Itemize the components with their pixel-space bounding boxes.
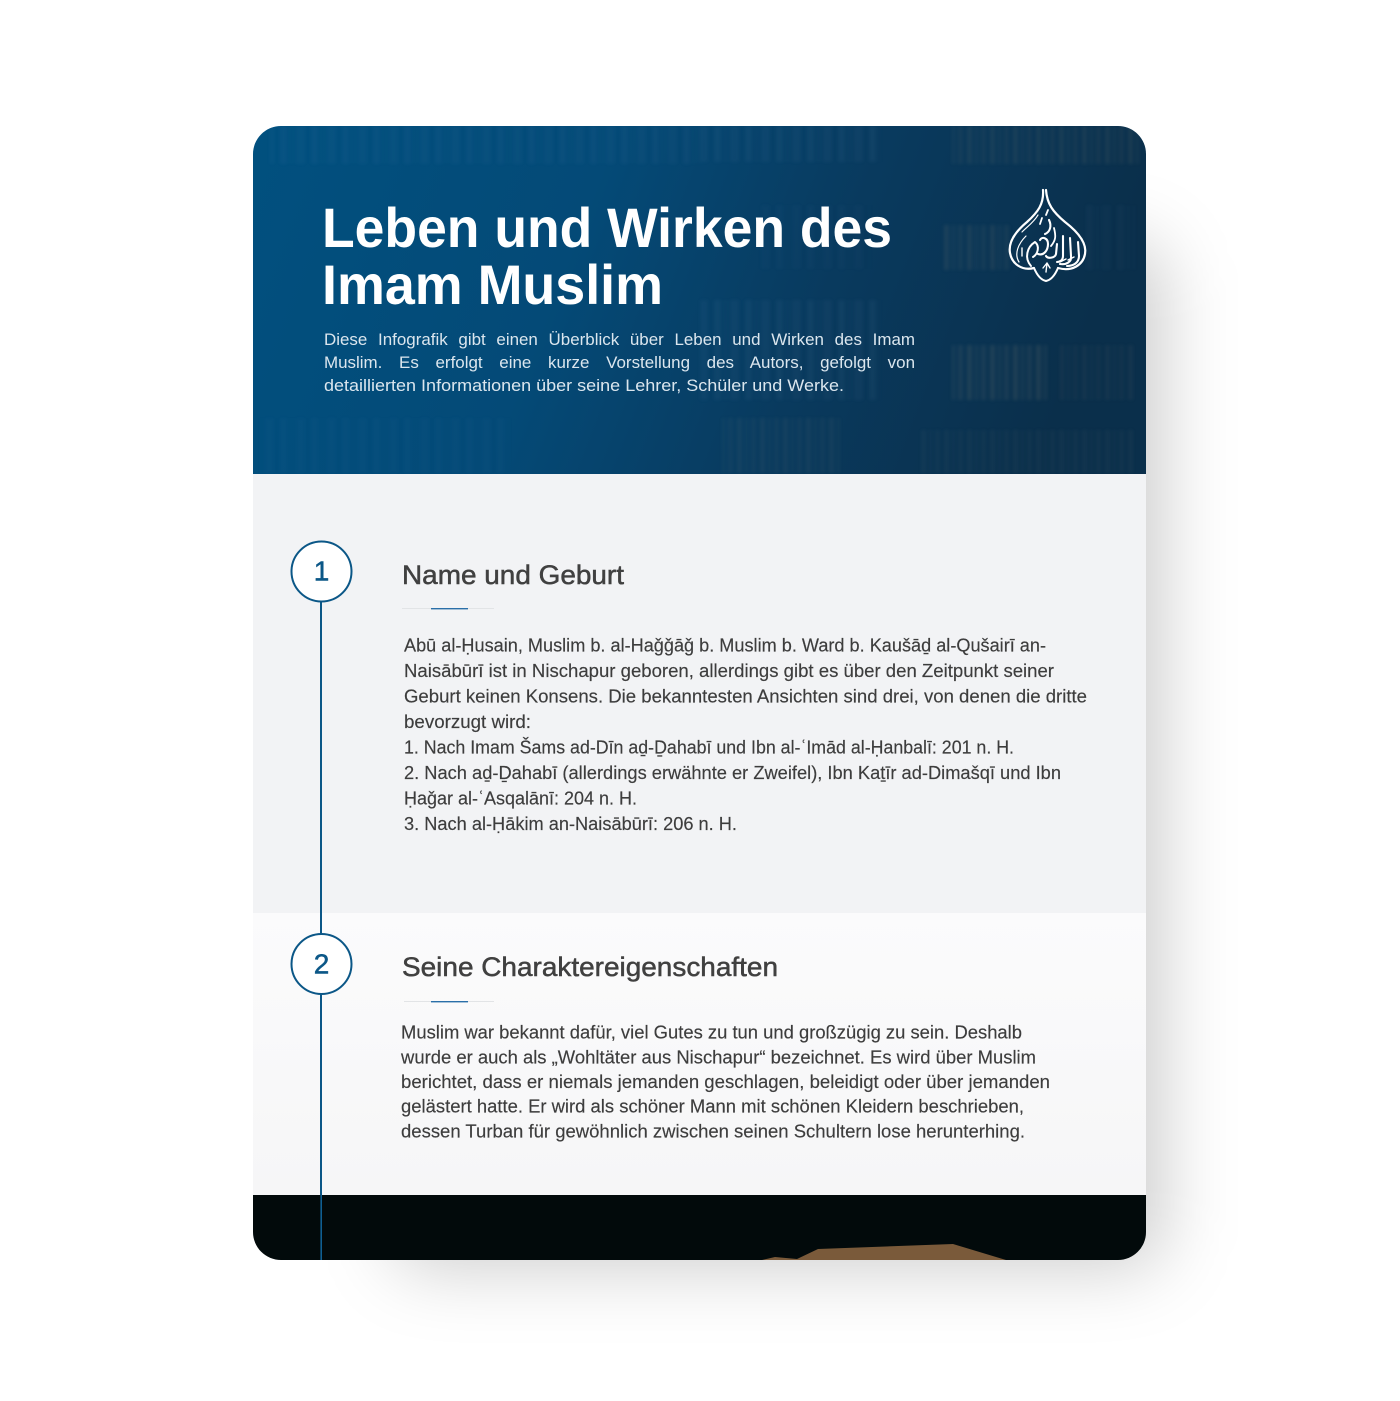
panel: card background <box>253 126 1146 1260</box>
intro text: Muslim. Es erfolgt eine kurze Vorstellung des Autors, gefolgt von <box>324 353 915 372</box>
step 1 badge: 1 <box>314 556 329 586</box>
text block: section 2: berichtet, dass er niemals jemanden geschlagen, beleidigt oder über jemanden <box>401 1072 1050 1092</box>
title: Leben und Wirken des <box>322 196 892 259</box>
step 2 badge <box>292 934 352 994</box>
title: Imam Muslim <box>322 253 663 316</box>
book shelf texture <box>738 127 1133 471</box>
text block: section 2: wurde er auch als „Wohltäter aus Nischapur“ bezeichnet. Es wird über Muslim <box>400 1048 1036 1068</box>
text block: section 2: Muslim war bekannt dafür, viel Gutes zu tun und großzügig zu sein. Deshalb <box>401 1023 1022 1043</box>
step 1 badge <box>292 542 352 602</box>
title <box>322 196 892 316</box>
text block: section 1: Abū al-Ḥusain, Muslim b. al-Haǧǧāǧ b. Muslim b. Ward b. Kaušāḏ al-Qušairī an- <box>404 636 1046 656</box>
text block: section 1: 3. Nach al-Ḥākim an-Naisābūrī: 206 n. H. <box>404 814 737 834</box>
intro text <box>324 330 915 395</box>
heading: Seine Charaktereigenschaften: Seine Charaktereigenschaften <box>402 952 778 982</box>
text block: section 1: bevorzugt wird: <box>404 712 531 732</box>
text block: section 1: Geburt keinen Konsens. Die bekanntesten Ansichten sind drei, von denen die dritte <box>404 687 1087 707</box>
text block: section 1: 2. Nach aḏ-Ḏahabī (allerdings erwähnte er Zweifel), Ibn Kaṯīr ad-Dimašqī und Ibn <box>404 763 1061 783</box>
panel: section 2 background <box>253 913 1146 1195</box>
text block: section 2: gelästert hatte. Er wird als schöner Mann mit schönen Kleidern beschrieben, <box>401 1097 1024 1117</box>
step 2 badge: 2 <box>314 948 329 980</box>
intro text: Diese Infografik gibt einen Überblick über Leben und Wirken des Imam <box>324 330 915 349</box>
heading divider 2 <box>404 1001 494 1002</box>
heading divider 1 <box>402 608 494 609</box>
panel: header background <box>253 126 1146 474</box>
intro text: detaillierten Informationen über seine Lehrer, Schüler und Werke. <box>324 376 844 395</box>
infographic card <box>253 126 1146 1260</box>
text block: section 1 <box>404 636 1087 834</box>
text block: section 2: dessen Turban für gewöhnlich zwischen seinen Schultern lose herunterhing. <box>401 1122 1025 1142</box>
card shadow <box>390 240 1165 1270</box>
text block: section 1: Naisābūrī ist in Nischapur geboren, allerdings gibt es über den Zeitpunkt seiner <box>404 661 1054 681</box>
text block: section 2 <box>400 1023 1050 1142</box>
panel: section 1 background <box>253 474 1146 913</box>
text block: section 1: 1. Nach Imam Šams ad-Dīn aḏ-Ḏahabī und Ibn al-ʿImād al-Ḥanbalī: 201 n. H. <box>404 737 1014 758</box>
panel: dark photo footer <box>253 1195 1146 1260</box>
icon: calligraphy logo <box>1010 190 1085 281</box>
heading: Name und Geburt: Name und Geburt <box>402 560 625 590</box>
timeline line <box>320 601 322 1260</box>
text block: section 1: Ḥaǧar al-ʿAsqalānī: 204 n. H. <box>404 789 637 809</box>
